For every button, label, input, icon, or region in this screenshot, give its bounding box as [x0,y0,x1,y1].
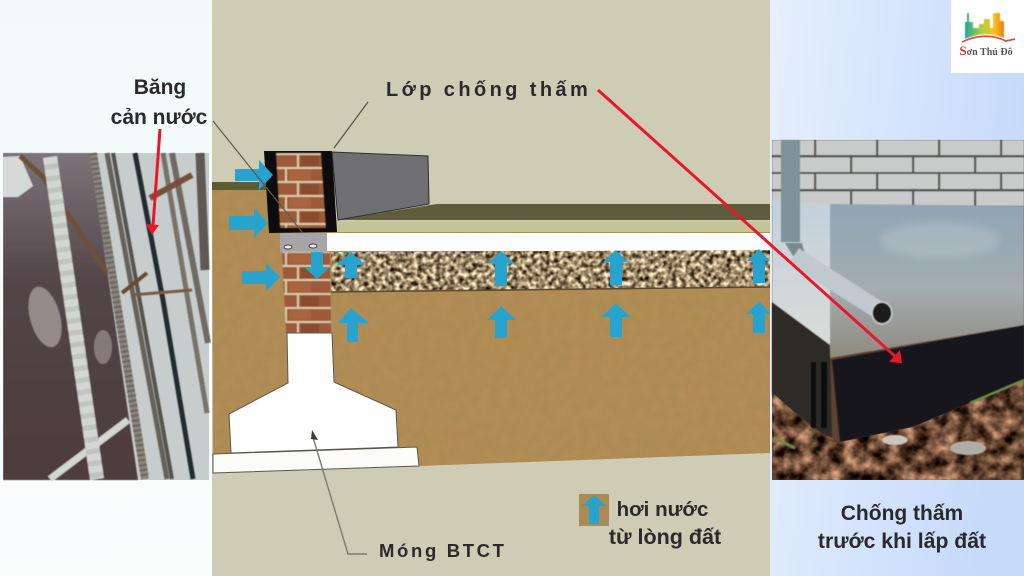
legend icon: moisture arrow [579,494,609,526]
screed layer [335,221,770,232]
leader line: water-stop to connector [213,121,302,232]
caption: Chống thấm trước khi lấp đất: Chống thấm [841,502,963,525]
label: Móng BTCT: Móng BTCT [379,540,507,561]
soil layer [212,190,770,466]
label: Lớp chống thấm: Lớp chống thấm [386,79,591,101]
panel: left photo of water-stop strip in rebar cage [3,153,209,480]
legend text: hơi nước từ lòng đất: hơi nước [617,498,708,521]
logo: Sơn Thủ Đô: Sơn Thủ Đô [959,43,1013,58]
white floor slab [327,233,770,251]
grey upstand block [332,152,429,220]
foundation wall above ground [264,151,337,233]
caption: Chống thấm trước khi lấp đất: trước khi lấp đất [818,530,986,553]
dark floor layer [338,204,770,220]
logo: Sơn Thủ Đô [951,0,1024,73]
panel: right background [770,0,1024,576]
panel: centre diagram background [212,0,770,576]
red arrow: to bitumen coating [598,90,902,363]
legend text: hơi nước từ lòng đất [609,498,721,549]
red arrow: to water-stop strip [146,129,160,235]
caption: Chống thấm trước khi lấp đất [818,502,986,553]
leader line: waterproof layer [334,102,368,148]
gravel layer [331,250,770,292]
legend text: hơi nước từ lòng đất: từ lòng đất [609,525,721,549]
heading: Băng cản nước: Băng [134,76,186,99]
grass strip at ground level [212,182,270,190]
grey damp-proof connector [280,233,327,252]
heading: Băng cản nước: cản nước [111,106,208,129]
leader line: concrete footing [311,430,367,554]
white reinforced concrete footing [213,333,419,473]
heading: Băng cản nước [111,76,208,129]
excavated soil [772,380,1024,480]
lower brick wall [282,252,331,333]
gravel lower edge [331,287,770,292]
blue moisture arrows [229,160,770,342]
panel: left background [0,0,212,576]
panel: right photo of waterproofed foundation [772,140,1024,480]
